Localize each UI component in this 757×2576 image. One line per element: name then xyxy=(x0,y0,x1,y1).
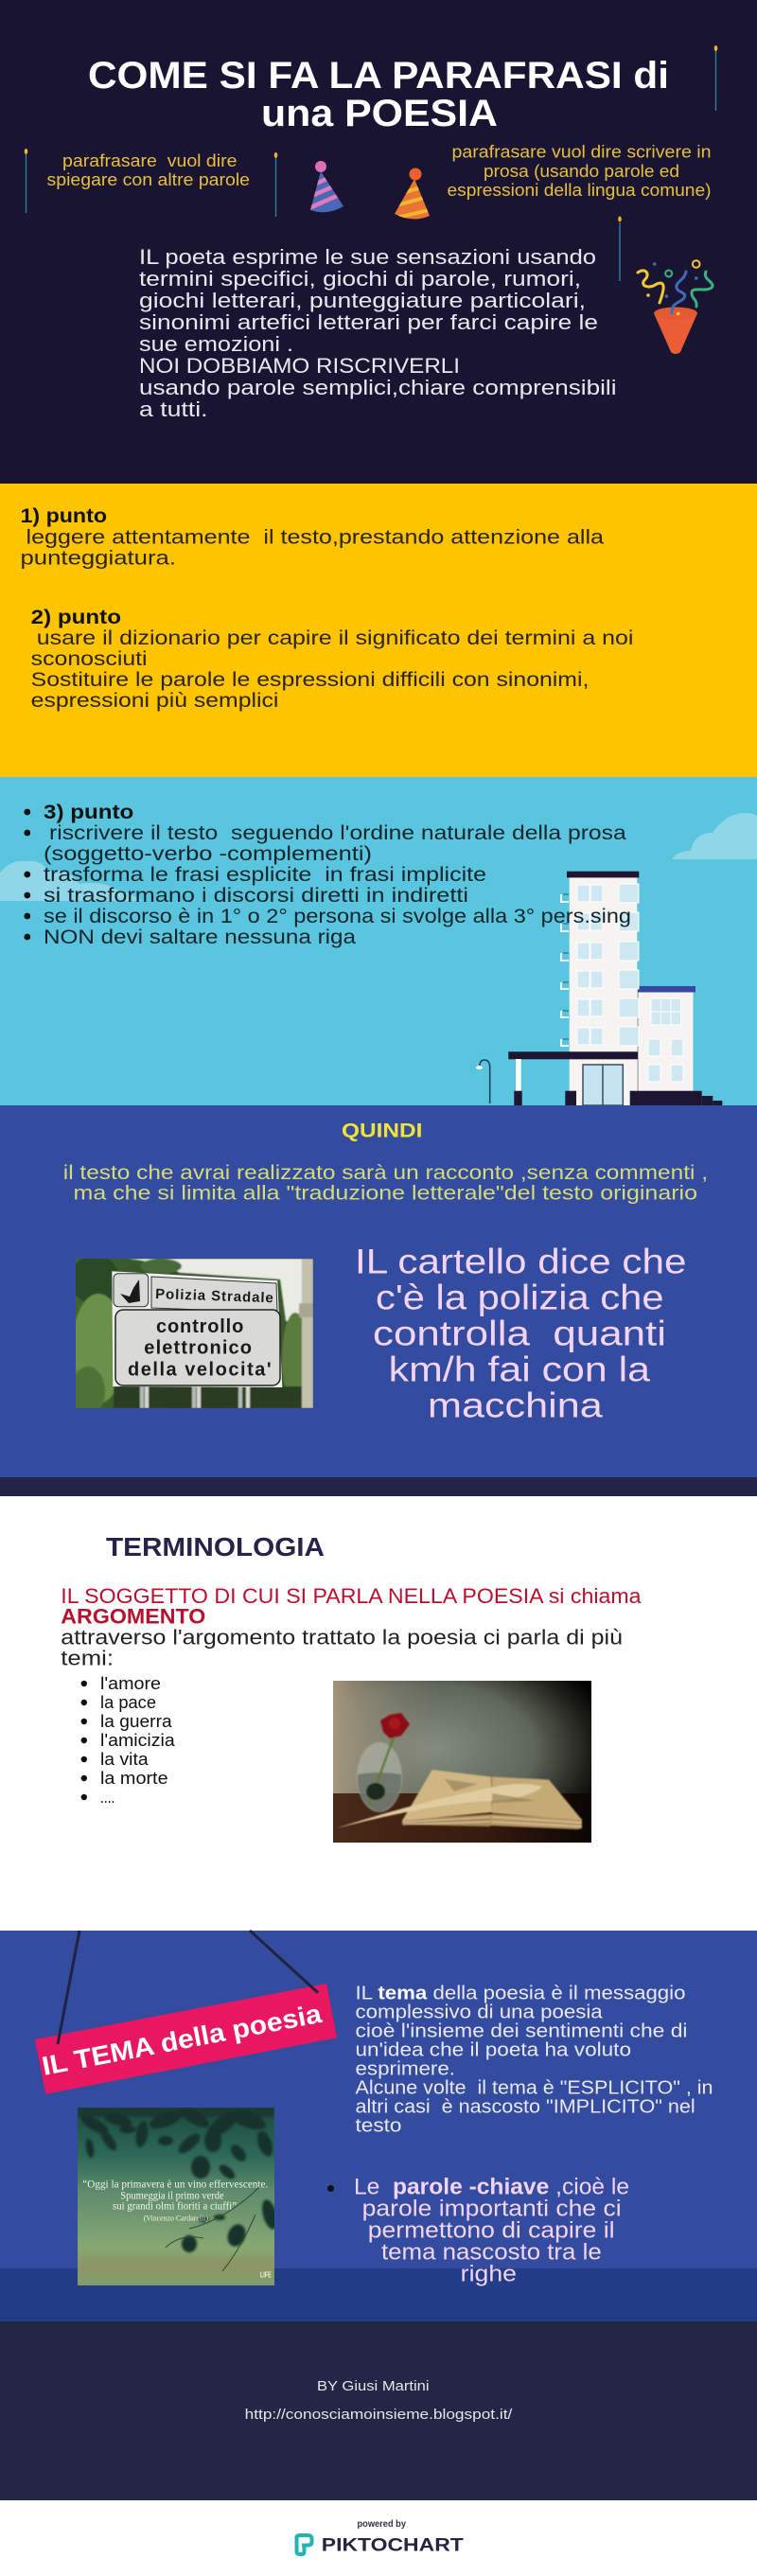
conclusion text: il testo che avrai realizzato sarà un racconto ,senza commenti , xyxy=(63,1162,708,1184)
step 3 list: se il discorso è in 1° o 2° persona si svolge alla 3° pers.sing xyxy=(44,906,631,927)
tema paragraph: altri casi è nascosto "IMPLICITO" nel xyxy=(356,2097,695,2118)
panel: terminologia xyxy=(61,1537,642,1843)
list of themes: la vita xyxy=(100,1750,150,1769)
list of themes: la guerra xyxy=(100,1712,173,1731)
tema paragraph: complessivo di una poesia xyxy=(356,2003,604,2023)
photo: rose and book xyxy=(333,1681,591,1843)
statement about the sign: km/h fai con la xyxy=(389,1350,650,1389)
intro paragraph: usando parole semplici,chiare comprensibili xyxy=(139,376,617,399)
intro paragraph: sinonimi artefici letterari per farci capire le xyxy=(139,310,598,334)
parole-chiave text: righe xyxy=(461,2262,517,2286)
banner: il tema della poesia: IL TEMA della poesia xyxy=(40,1999,325,2081)
argomento definition: attraverso l'argomento trattato la poesia ci parla di più xyxy=(61,1626,623,1649)
list of themes: la pace xyxy=(100,1693,156,1712)
step 2: usare il dizionario per capire il significato dei termini a noi xyxy=(37,627,633,649)
parole-chiave text: parole importanti che ci xyxy=(362,2196,622,2222)
list of themes: la morte xyxy=(100,1769,168,1788)
conclusion text: ma che si limita alla "traduzione letterale"del testo originario xyxy=(74,1183,697,1204)
icon: orange party hat xyxy=(395,168,430,220)
heading: terminologia: TERMINOLOGIA xyxy=(106,1532,325,1561)
sign: elettronico xyxy=(144,1338,252,1359)
statement about the sign xyxy=(355,1242,687,1425)
icon: sparkler above popper xyxy=(618,216,622,281)
panel: steps 1 and 2 xyxy=(0,484,757,777)
photo: quotation over leaves: (Vincenzo Cardarelli) xyxy=(144,2214,208,2222)
argomento definition: temi: xyxy=(61,1647,114,1669)
statement about the sign: macchina xyxy=(428,1385,603,1425)
tema paragraph: esprimere. xyxy=(356,2059,455,2080)
step 1: punteggiatura. xyxy=(21,547,176,570)
tema paragraph: un'idea che il poeta ha voluto xyxy=(356,2040,631,2061)
step 3 list: NON devi saltare nessuna riga xyxy=(44,926,356,948)
step 1: 1) punto xyxy=(21,505,107,527)
title: COME SI FA LA PARAFRASI di xyxy=(88,55,669,97)
intro paragraph: IL poeta esprime le sue sensazioni usando xyxy=(139,245,596,269)
heading: quindi: QUINDI xyxy=(342,1120,422,1141)
step 2 xyxy=(31,607,633,712)
step 1: leggere attentamente il testo,prestando attenzione alla xyxy=(26,526,604,549)
statement about the sign: controlla quanti xyxy=(373,1314,666,1353)
intro paragraph: NOI DOBBIAMO RISCRIVERLI xyxy=(139,354,460,378)
tema paragraph xyxy=(356,1984,713,2137)
step 2: espressioni più semplici xyxy=(31,690,278,712)
photo: road sign xyxy=(70,1255,313,1416)
step 3 list: trasforma le frasi esplicite in frasi implicite xyxy=(44,864,486,886)
wordmark: PIKTOCHART xyxy=(322,2536,464,2556)
sign: della velocita' xyxy=(128,1359,272,1380)
argomento definition: ARGOMENTO xyxy=(61,1605,205,1628)
icon: sparkler left xyxy=(25,149,27,213)
tema paragraph: testo xyxy=(356,2116,401,2137)
definition right: espressioni della lingua comune) xyxy=(447,181,712,200)
icon: sparkler top right xyxy=(714,45,717,111)
icon: piktochart logo xyxy=(297,2535,312,2554)
tema paragraph: Alcune volte il tema è "ESPLICITO" , in xyxy=(356,2078,713,2099)
sign: controllo xyxy=(156,1316,243,1337)
definition right: prosa (usando parole ed xyxy=(484,162,679,181)
blog url: http://conosciamoinsieme.blogspot.it/ xyxy=(245,2407,513,2423)
photo: quotation over leaves: “Oggi la primavera è un vino effervescente. xyxy=(82,2179,268,2190)
step 2: Sostituire le parole le espressioni difficili con sinonimi, xyxy=(31,669,589,691)
panel: header xyxy=(0,0,757,484)
list of themes xyxy=(81,1674,176,1807)
sign xyxy=(112,1271,282,1387)
intro paragraph xyxy=(139,245,617,421)
cloud left xyxy=(0,861,142,901)
step 2: sconosciuti xyxy=(31,648,148,670)
hanging banner strings xyxy=(58,1931,318,2044)
step 3 list: 3) punto xyxy=(44,802,133,823)
tema paragraph: IL tema della poesia è il messaggio xyxy=(356,1984,685,2004)
statement about the sign: IL cartello dice che xyxy=(355,1242,687,1281)
step 3 list: riscrivere il testo seguendo l'ordine naturale della prosa xyxy=(49,822,626,844)
panel: tema xyxy=(0,1931,757,2321)
panel: quindi xyxy=(0,1105,757,1477)
parole-chiave text: Le parole -chiave ,cioè le xyxy=(354,2175,629,2199)
panel: step 3 xyxy=(0,777,757,1105)
intro paragraph: sue emozioni . xyxy=(139,332,293,356)
photo: quotation over leaves xyxy=(78,2103,280,2285)
icon: sparkler centre xyxy=(274,152,277,217)
statement about the sign: c'è la polizia che xyxy=(376,1278,664,1317)
definition right: parafrasare vuol dire scrivere in xyxy=(452,142,712,161)
title: una POESIA xyxy=(261,93,498,134)
list of themes: l'amore xyxy=(100,1674,161,1693)
title xyxy=(88,55,669,134)
argomento definition: IL SOGGETTO DI CUI SI PARLA NELLA POESIA si chiama xyxy=(61,1584,642,1608)
parole-chiave text: tema nascosto tra le xyxy=(381,2239,602,2266)
panel: credits xyxy=(0,2321,757,2500)
panel: powered by xyxy=(0,2500,757,2576)
photo: quotation over leaves: sui grandi olmi fioriti a ciuffi” xyxy=(113,2201,237,2213)
tema paragraph: cioè l'insieme dei sentimenti che di xyxy=(356,2021,687,2042)
parole-chiave text xyxy=(327,2175,629,2286)
step 3 list: (soggetto-verbo -complementi) xyxy=(44,843,372,865)
intro paragraph: giochi letterari, punteggiature particolari, xyxy=(139,289,586,312)
step 3 list: si trasformano i discorsi diretti in indiretti xyxy=(44,885,468,907)
definition right xyxy=(447,142,712,200)
definition left: spiegare con altre parole xyxy=(47,170,250,189)
icon: blue party hat xyxy=(310,161,343,212)
conclusion text xyxy=(63,1162,708,1204)
cloud right xyxy=(672,813,757,859)
icon: building xyxy=(476,872,722,1105)
argomento definition xyxy=(61,1584,642,1669)
banner: il tema della poesia xyxy=(35,1984,337,2094)
definition left: parafrasare vuol dire xyxy=(62,151,237,170)
intro paragraph: termini specifici, giochi di parole, rumori, xyxy=(139,267,581,291)
powered by label: powered by xyxy=(358,2518,406,2530)
divider band xyxy=(0,1477,757,1496)
step 1 xyxy=(21,505,604,570)
definition left xyxy=(47,151,250,189)
photo: quotation over leaves: LIFE xyxy=(260,2271,272,2279)
photo: quotation over leaves: Spumeggia il primo verde xyxy=(120,2190,224,2201)
list of themes: l'amicizia xyxy=(100,1731,176,1750)
author: BY Giusi Martini xyxy=(317,2378,430,2394)
step 3 list xyxy=(24,802,631,948)
parole-chiave text: permettono di capire il xyxy=(368,2218,615,2243)
icon: party popper xyxy=(638,260,713,354)
step 2: 2) punto xyxy=(31,607,121,628)
intro paragraph: a tutti. xyxy=(139,397,208,421)
sign: Polizia Stradale xyxy=(155,1286,273,1306)
list of themes: .... xyxy=(100,1788,114,1807)
